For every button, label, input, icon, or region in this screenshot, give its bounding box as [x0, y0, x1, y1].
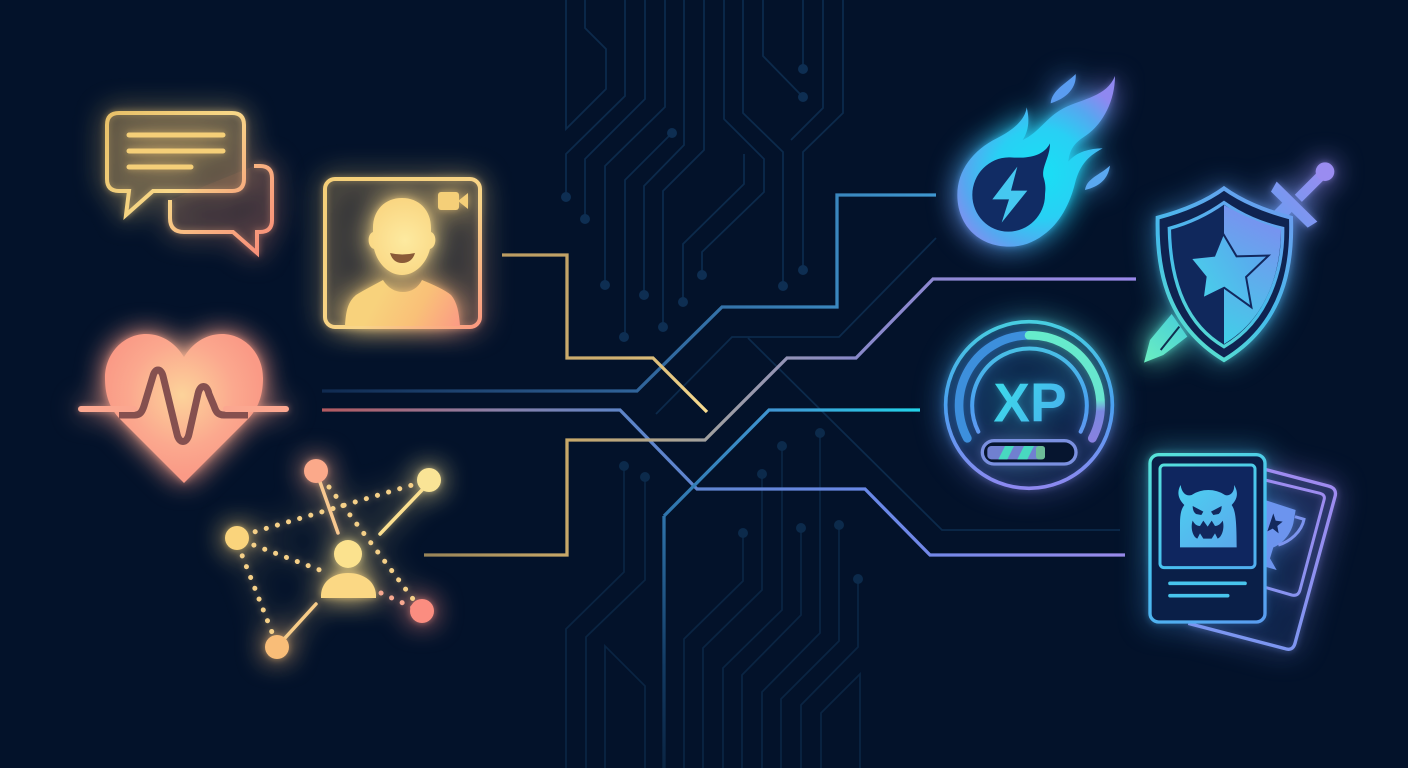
XP label: XP [993, 372, 1067, 434]
icon: comet flame [957, 74, 1115, 247]
icon: video call portrait [325, 179, 480, 327]
icon: heart with pulse [81, 334, 286, 483]
icon: monster and trophy cards [1150, 455, 1335, 649]
icon: chat bubbles [107, 113, 272, 253]
connector: heart to card (red to violet) [322, 410, 1125, 555]
icon: XP gauge [946, 322, 1112, 488]
icon: social network [225, 459, 441, 659]
connector: network to shield (gold to violet) [424, 279, 1136, 555]
circuit traces: bottom [566, 428, 863, 768]
icon: shield and sword [1144, 162, 1334, 363]
connector: video to centre (gold) [502, 255, 707, 412]
connector: lower trace to XP (cyan) [664, 410, 920, 768]
circuit traces: top [561, 0, 1120, 530]
connector: heart to comet (blue) [322, 195, 936, 391]
